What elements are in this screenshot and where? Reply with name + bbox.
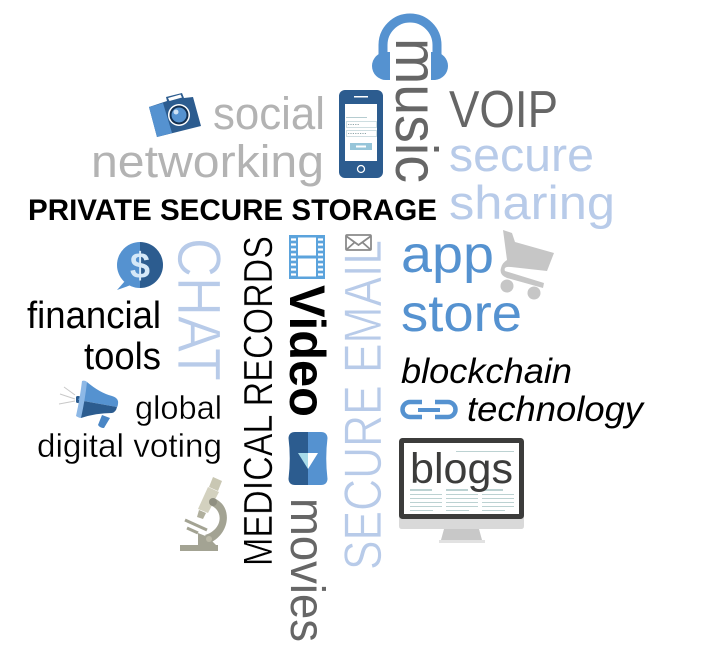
icon: speech bubble with dollar: $: [130, 245, 150, 286]
text: private secure storage: PRIVATE SECURE STORAGE: [28, 194, 437, 227]
icon: chain link: [402, 402, 456, 417]
icon: desktop monitor with blogs: [399, 440, 524, 543]
text: technology: technology: [467, 390, 646, 429]
text: medical records: MEDICAL RECORDS: [235, 236, 281, 566]
text: secure email: SECURE EMAIL: [334, 240, 393, 570]
text: music: music: [383, 38, 449, 183]
icon: envelope: [346, 235, 371, 250]
text: Video: Video: [279, 285, 335, 417]
text: tools: tools: [84, 336, 161, 378]
text: blockchain: blockchain: [401, 352, 572, 391]
text: financial: financial: [27, 295, 161, 337]
icon: camera: [149, 93, 201, 137]
text: VOIP: VOIP: [449, 81, 558, 139]
text: secure: secure: [449, 128, 594, 181]
icon: megaphone: [59, 381, 118, 428]
icon: smartphone: [339, 90, 383, 178]
icon: play tile: [288, 432, 328, 485]
text: store: store: [401, 285, 522, 343]
icon: headphones: [372, 18, 448, 80]
text: app: app: [401, 226, 494, 284]
icon: microscope: [180, 477, 227, 551]
text: CHAT: CHAT: [165, 238, 233, 381]
text: networking: networking: [91, 136, 324, 187]
text: sharing: sharing: [449, 176, 615, 229]
icon: shopping cart: [500, 230, 554, 300]
text: global: global: [135, 389, 222, 426]
icon: speech bubble with dollar: [117, 242, 163, 290]
text: movies: movies: [280, 498, 333, 642]
icon: desktop monitor with blogs: blogs: [410, 445, 513, 493]
text: social: social: [213, 88, 325, 139]
text: digital voting: digital voting: [37, 427, 222, 464]
icon: film strip: [289, 235, 325, 279]
